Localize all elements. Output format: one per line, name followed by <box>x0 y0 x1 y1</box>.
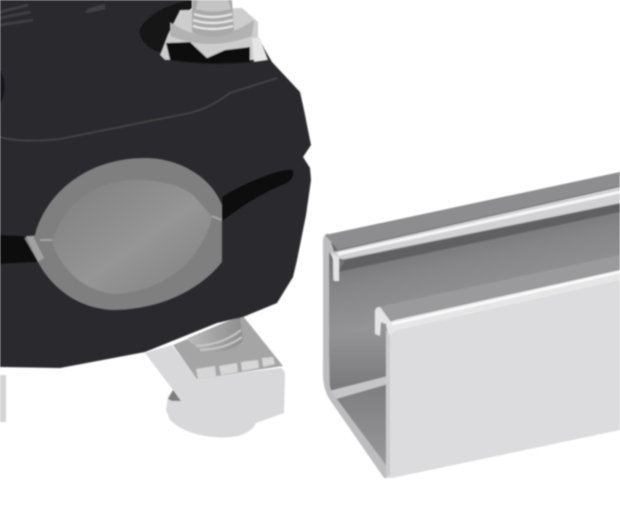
upper body seam <box>0 78 277 141</box>
threaded stud <box>188 316 243 352</box>
front edge shading <box>386 330 390 476</box>
front lip hook <box>375 307 391 336</box>
left hole <box>0 70 5 105</box>
right split gap <box>222 170 294 221</box>
insert inner face <box>52 180 212 294</box>
clamp body <box>0 0 311 368</box>
bolt recess shadow <box>139 0 192 52</box>
scalloped dark nut base <box>166 42 250 64</box>
small part at left edge <box>0 375 6 422</box>
back flange top <box>325 172 620 250</box>
hex nut <box>160 8 267 60</box>
front lip highlight <box>386 270 620 338</box>
back flange highlight <box>334 187 620 259</box>
T-nut <box>0 316 285 438</box>
grey cable insert <box>24 158 222 310</box>
strut channel <box>323 172 620 478</box>
channel back wall <box>326 178 620 392</box>
threaded bolt <box>192 0 234 37</box>
front lip top <box>378 255 620 323</box>
clamp silhouette <box>0 0 311 368</box>
channel left outer edge <box>323 233 388 478</box>
T-nut body <box>145 345 285 438</box>
insert outer ring <box>24 158 222 310</box>
back lip hook <box>331 252 339 281</box>
insert split lines <box>40 216 222 240</box>
bolt and nut <box>160 0 268 64</box>
logo marks <box>0 5 105 25</box>
left split gap <box>0 235 38 264</box>
channel front face <box>387 273 620 478</box>
T-nut top face <box>173 316 283 379</box>
T-nut teeth <box>196 357 275 379</box>
channel floor <box>330 380 388 472</box>
